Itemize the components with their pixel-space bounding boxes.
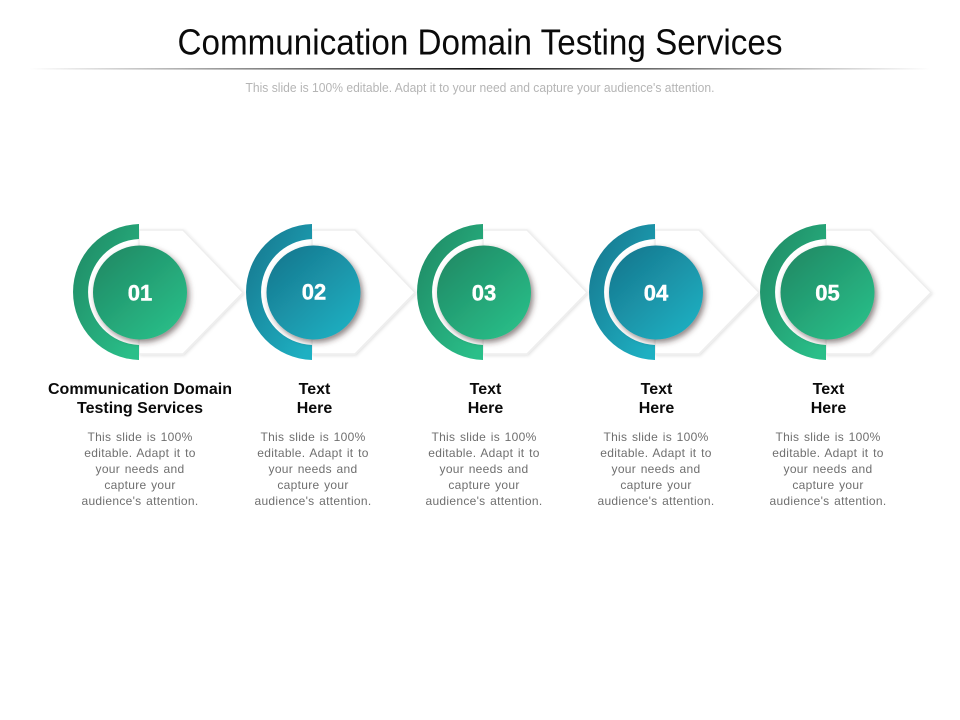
heading 04: Here — [639, 400, 674, 417]
body 01: This slide is 100% — [87, 430, 193, 444]
heading 01 — [48, 381, 232, 417]
step 05 — [760, 224, 931, 508]
heading 04 — [639, 381, 674, 417]
step 04 — [589, 224, 759, 508]
heading 01: Communication Domain — [48, 381, 232, 398]
ring 05 — [760, 224, 826, 360]
heading 05: Here — [811, 400, 846, 417]
body 04: This slide is 100% — [603, 430, 709, 444]
ring 03 — [417, 224, 483, 360]
body 03: editable. Adapt it to — [428, 446, 540, 460]
body 03: your needs and — [440, 462, 528, 476]
heading 03: Here — [468, 400, 503, 417]
body 04 — [597, 430, 715, 508]
heading 03: Text — [470, 381, 502, 398]
body 04: capture your — [620, 478, 692, 492]
step 01 — [48, 224, 243, 508]
number 02: 02 — [302, 280, 326, 304]
body 03: audience's attention. — [425, 494, 543, 508]
body 01: audience's attention. — [81, 494, 199, 508]
number 05: 05 — [815, 280, 840, 306]
body 02: audience's attention. — [254, 494, 372, 508]
arrow 02 — [312, 230, 415, 354]
ring 01 — [73, 224, 139, 360]
arrow 01 — [139, 230, 243, 354]
ring 04 — [589, 224, 655, 360]
heading 05 — [811, 381, 846, 417]
heading 04: Text — [641, 381, 673, 398]
arrow 04 — [655, 230, 759, 354]
circle 04 — [609, 246, 703, 340]
body 05: editable. Adapt it to — [772, 446, 884, 460]
heading 02: Here — [297, 400, 332, 417]
heading 02 — [297, 381, 332, 417]
body 02: capture your — [277, 478, 349, 492]
title: Communication Domain Testing Services — [178, 22, 782, 62]
body 01: capture your — [104, 478, 176, 492]
title rule — [30, 68, 930, 70]
heading 05: Text — [813, 381, 845, 398]
body 05: your needs and — [784, 462, 872, 476]
body 01 — [81, 430, 199, 508]
body 04: audience's attention. — [597, 494, 715, 508]
arrow 05 — [826, 230, 931, 354]
body 02: your needs and — [269, 462, 357, 476]
body 02 — [254, 430, 372, 508]
body 01: your needs and — [96, 462, 184, 476]
body 04: editable. Adapt it to — [600, 446, 712, 460]
heading 01: Testing Services — [77, 400, 203, 417]
circle 03 — [437, 246, 531, 340]
body 02: This slide is 100% — [260, 430, 366, 444]
body 01: editable. Adapt it to — [84, 446, 196, 460]
body 02: editable. Adapt it to — [257, 446, 369, 460]
body 05: audience's attention. — [769, 494, 887, 508]
number 04: 04 — [644, 280, 669, 306]
ring 02 — [246, 224, 312, 360]
body 05: This slide is 100% — [775, 430, 881, 444]
body 05: capture your — [792, 478, 864, 492]
circle 01 — [93, 246, 187, 340]
subtitle: This slide is 100% editable. Adapt it to your need and capture your audience's attention. — [246, 80, 714, 95]
body 05 — [769, 430, 887, 508]
body 03: capture your — [448, 478, 520, 492]
arrow 03 — [483, 230, 587, 354]
body 03 — [425, 430, 543, 508]
number 03: 03 — [472, 280, 496, 306]
heading 03 — [468, 381, 503, 417]
body 04: your needs and — [612, 462, 700, 476]
circle 05 — [780, 246, 874, 340]
body 03: This slide is 100% — [431, 430, 537, 444]
circle 02 — [266, 246, 360, 340]
step 03 — [417, 224, 587, 508]
heading 02: Text — [299, 381, 331, 398]
step 02 — [246, 224, 415, 508]
number 01: 01 — [128, 280, 152, 306]
